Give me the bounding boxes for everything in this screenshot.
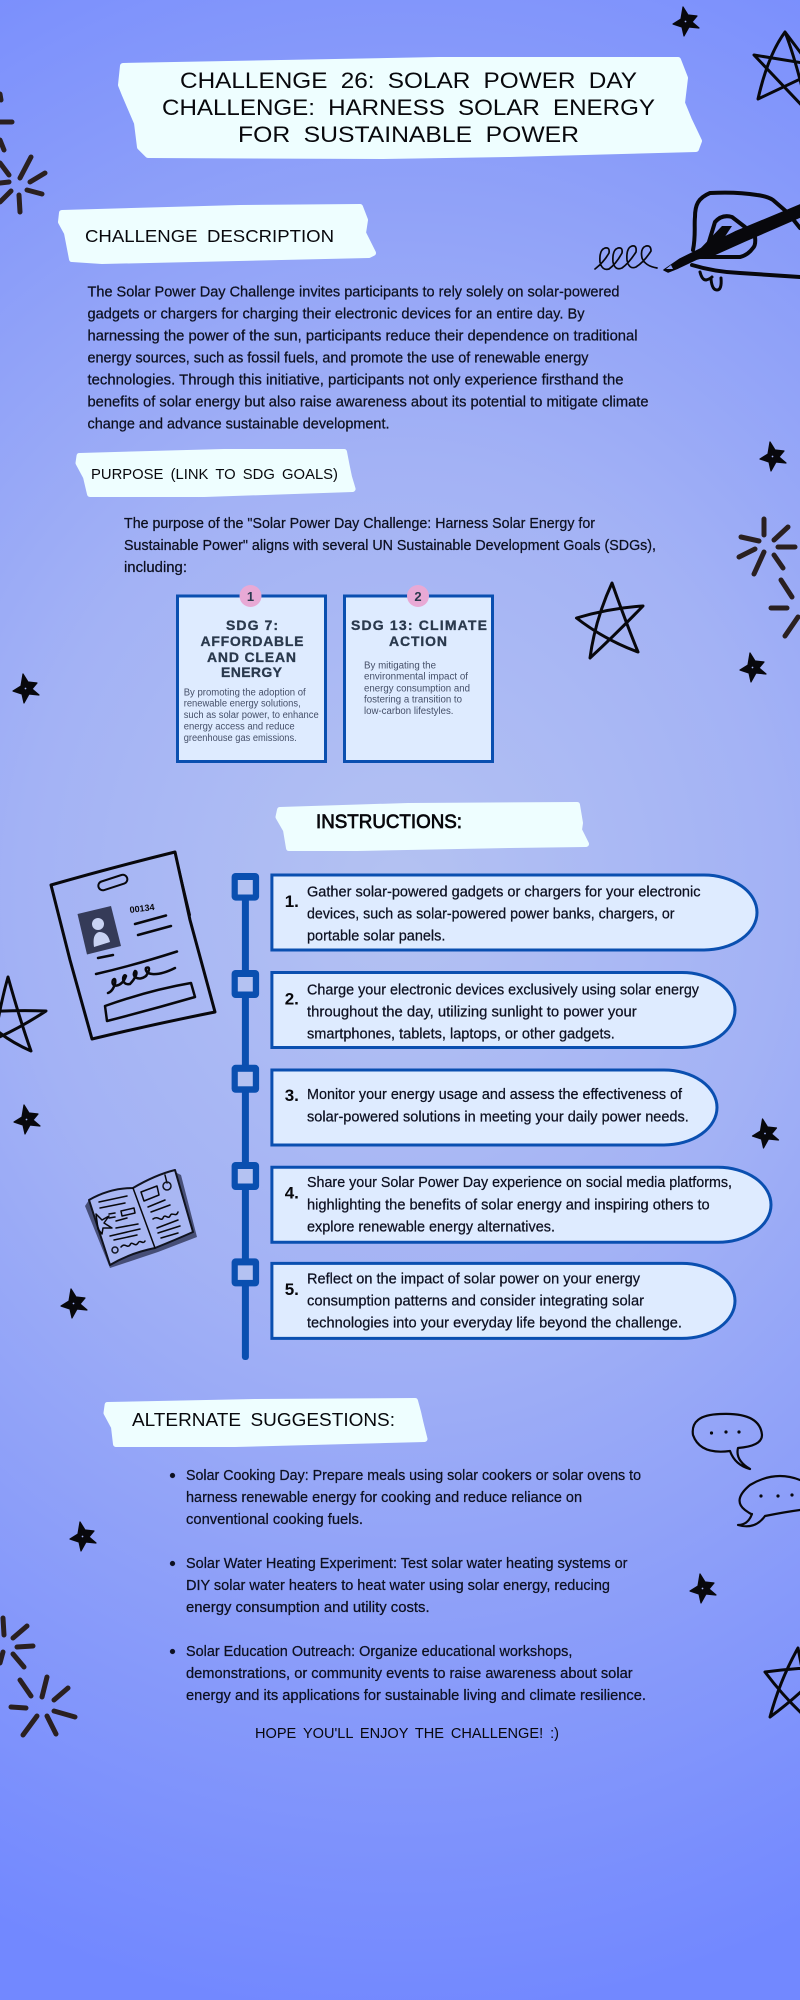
step 1: 1.	[285, 892, 299, 911]
card description: By promoting the adoption of	[184, 687, 306, 698]
step 5: technologies into your everyday life beyond the challenge.	[307, 1314, 682, 1331]
card description: energy access and reduce	[184, 722, 295, 732]
text block: challenge description: benefits of solar energy but also raise awareness about its potential to mitigate climate	[88, 394, 648, 411]
step 5: Reflect on the impact of solar power on your energy	[307, 1270, 640, 1287]
step 1: Gather solar-powered gadgets or chargers for your electronic	[307, 883, 701, 900]
step 1: portable solar panels.	[307, 927, 445, 944]
suggestion 1: harness renewable energy for cooking and reduce reliance on	[186, 1489, 582, 1506]
text block: purpose: including:	[124, 559, 187, 576]
step 2: smartphones, tablets, laptops, or other gadgets.	[307, 1025, 615, 1042]
icon: small star top right	[673, 7, 699, 36]
icon: squiggle	[595, 246, 657, 269]
title text	[162, 68, 655, 147]
step 5: consumption patterns and consider integrating solar	[307, 1292, 644, 1310]
title text: FOR SUSTAINABLE POWER	[238, 122, 579, 147]
illustration: ID card: 00134	[129, 902, 155, 915]
icon: small star right middle	[740, 653, 766, 682]
step 3: 3.	[285, 1086, 299, 1105]
heading panel: challenge description: CHALLENGE DESCRIPTION	[85, 226, 334, 246]
icon: outline star left	[0, 977, 46, 1051]
badge 2: 2	[414, 589, 422, 604]
icon: speech bubble one	[693, 1414, 762, 1469]
card description: low-carbon lifestyles.	[364, 706, 454, 717]
card description: energy consumption and	[364, 683, 470, 694]
step 3	[272, 1070, 717, 1145]
card heading: AND CLEAN	[207, 649, 296, 665]
card description: By mitigating the	[364, 661, 437, 672]
card: SDG 7	[178, 585, 326, 762]
text block: challenge description: change and advance sustainable development.	[88, 416, 390, 433]
card heading: SDG 13: CLIMATE	[351, 617, 487, 633]
card heading	[351, 617, 487, 649]
card heading: AFFORDABLE	[200, 633, 304, 649]
text block: purpose	[124, 515, 656, 576]
card description: environmental impact of	[364, 672, 468, 682]
icon: small star right lower	[752, 1119, 778, 1148]
step 3: Monitor your energy usage and assess the effectiveness of	[307, 1086, 683, 1103]
icon: small star left lower	[14, 1105, 40, 1134]
icon: sparkle top left	[0, 94, 45, 212]
card description	[364, 661, 470, 717]
card heading	[200, 617, 304, 680]
card description: renewable energy solutions,	[184, 698, 301, 710]
heading panel: alternate suggestions: ALTERNATE SUGGESTIONS:	[132, 1410, 395, 1430]
step 2	[272, 972, 735, 1048]
icon: hand writing with pen	[664, 193, 800, 290]
suggestion 2: DIY solar water heaters to heat water using solar energy, reducing	[186, 1577, 610, 1594]
icon: sparkle right	[739, 519, 798, 636]
suggestion 1: conventional cooking fuels.	[186, 1511, 363, 1528]
step 4: Share your Solar Power Day experience on social media platforms,	[307, 1174, 732, 1191]
step 4: highlighting the benefits of solar energy and inspiring others to	[307, 1196, 710, 1213]
text block: purpose: Sustainable Power" aligns with several UN Sustainable Development Goals (SDGs),	[124, 537, 656, 554]
heading panel: challenge description	[61, 207, 373, 261]
list: alternate suggestions	[170, 1467, 646, 1704]
step 1: devices, such as solar-powered power banks, chargers, or	[307, 906, 675, 923]
heading panel: purpose	[78, 452, 353, 494]
card description	[184, 687, 319, 744]
step 1	[272, 875, 757, 950]
card description: such as solar power, to enhance	[184, 710, 319, 721]
step 2: Charge your electronic devices exclusively using solar energy	[307, 981, 699, 998]
step 5: 5.	[285, 1280, 299, 1299]
heading panel: alternate suggestions	[106, 1401, 424, 1444]
step 2: 2.	[285, 989, 299, 1008]
badge 1	[240, 585, 262, 607]
text block: challenge description	[88, 284, 648, 433]
suggestion 3: demonstrations, or community events to raise awareness about solar	[186, 1665, 633, 1682]
icon: small star right of purpose	[760, 442, 786, 471]
heading panel: instructions: INSTRUCTIONS:	[316, 812, 462, 833]
title panel	[121, 60, 699, 156]
badge 1: 1	[247, 589, 254, 604]
card heading: ENERGY	[221, 664, 283, 680]
heading panel: purpose: PURPOSE (LINK TO SDG GOALS)	[91, 467, 338, 483]
closing line: HOPE YOU'LL ENJOY THE CHALLENGE! :)	[255, 1725, 559, 1742]
icon: outline star top right	[754, 32, 800, 112]
suggestion 3	[170, 1643, 646, 1704]
card heading: ACTION	[389, 633, 447, 649]
suggestion 1	[170, 1467, 641, 1528]
icon: small star right of list	[690, 1574, 716, 1603]
text block: challenge description: harnessing the power of the sun, participants reduce their dependence on traditional	[88, 328, 638, 345]
card description: fostering a transition to	[364, 694, 463, 705]
title text: CHALLENGE 26: SOLAR POWER DAY	[180, 68, 637, 93]
step 5	[272, 1263, 735, 1338]
suggestion 1: Solar Cooking Day: Prepare meals using solar cookers or solar ovens to	[186, 1467, 641, 1484]
icon: outline star bottom right	[765, 1648, 800, 1725]
text block: challenge description: gadgets or chargers for charging their electronic devices for an entire day. By	[88, 306, 585, 323]
icon: sparkles bottom left	[0, 1618, 75, 1735]
suggestion 2: energy consumption and utility costs.	[186, 1599, 430, 1616]
card heading: SDG 7:	[226, 617, 278, 633]
step 4: explore renewable energy alternatives.	[307, 1218, 555, 1235]
icon: small star left	[13, 674, 39, 703]
step 2: throughout the day, utilizing sunlight to power your	[307, 1004, 637, 1021]
icon: small star bottom of book	[61, 1289, 87, 1318]
suggestion 3: Solar Education Outreach: Organize educational workshops,	[186, 1643, 572, 1660]
timeline	[232, 873, 259, 1360]
card description: greenhouse gas emissions.	[184, 733, 297, 744]
card: SDG 13	[344, 585, 492, 762]
text block: challenge description: The Solar Power Day Challenge invites participants to rely solely on solar-powered	[88, 284, 620, 301]
icon: small star left of list	[70, 1522, 96, 1551]
icon: outline star middle	[576, 583, 643, 658]
title text: CHALLENGE: HARNESS SOLAR ENERGY	[162, 95, 655, 120]
heading panel: instructions	[278, 805, 586, 848]
illustration: ID card	[51, 852, 215, 1039]
suggestion 3: energy and its applications for sustainable living and climate resilience.	[186, 1687, 646, 1704]
text block: purpose: The purpose of the "Solar Power Day Challenge: Harness Solar Energy for	[124, 515, 595, 532]
text block: challenge description: energy sources, such as fossil fuels, and promote the use of renewable energy	[88, 350, 589, 367]
badge 2	[407, 585, 429, 607]
text block: challenge description: technologies. Through this initiative, participants not only experience firsthand the	[88, 372, 624, 389]
icon: speech bubble two	[738, 1476, 800, 1526]
illustration: open book	[85, 1170, 197, 1268]
suggestion 2: Solar Water Heating Experiment: Test solar water heating systems or	[186, 1555, 628, 1572]
suggestion 2	[170, 1555, 628, 1616]
step 4: 4.	[285, 1184, 299, 1203]
step 4	[272, 1167, 771, 1242]
step 3: solar-powered solutions in meeting your daily power needs.	[307, 1108, 689, 1125]
